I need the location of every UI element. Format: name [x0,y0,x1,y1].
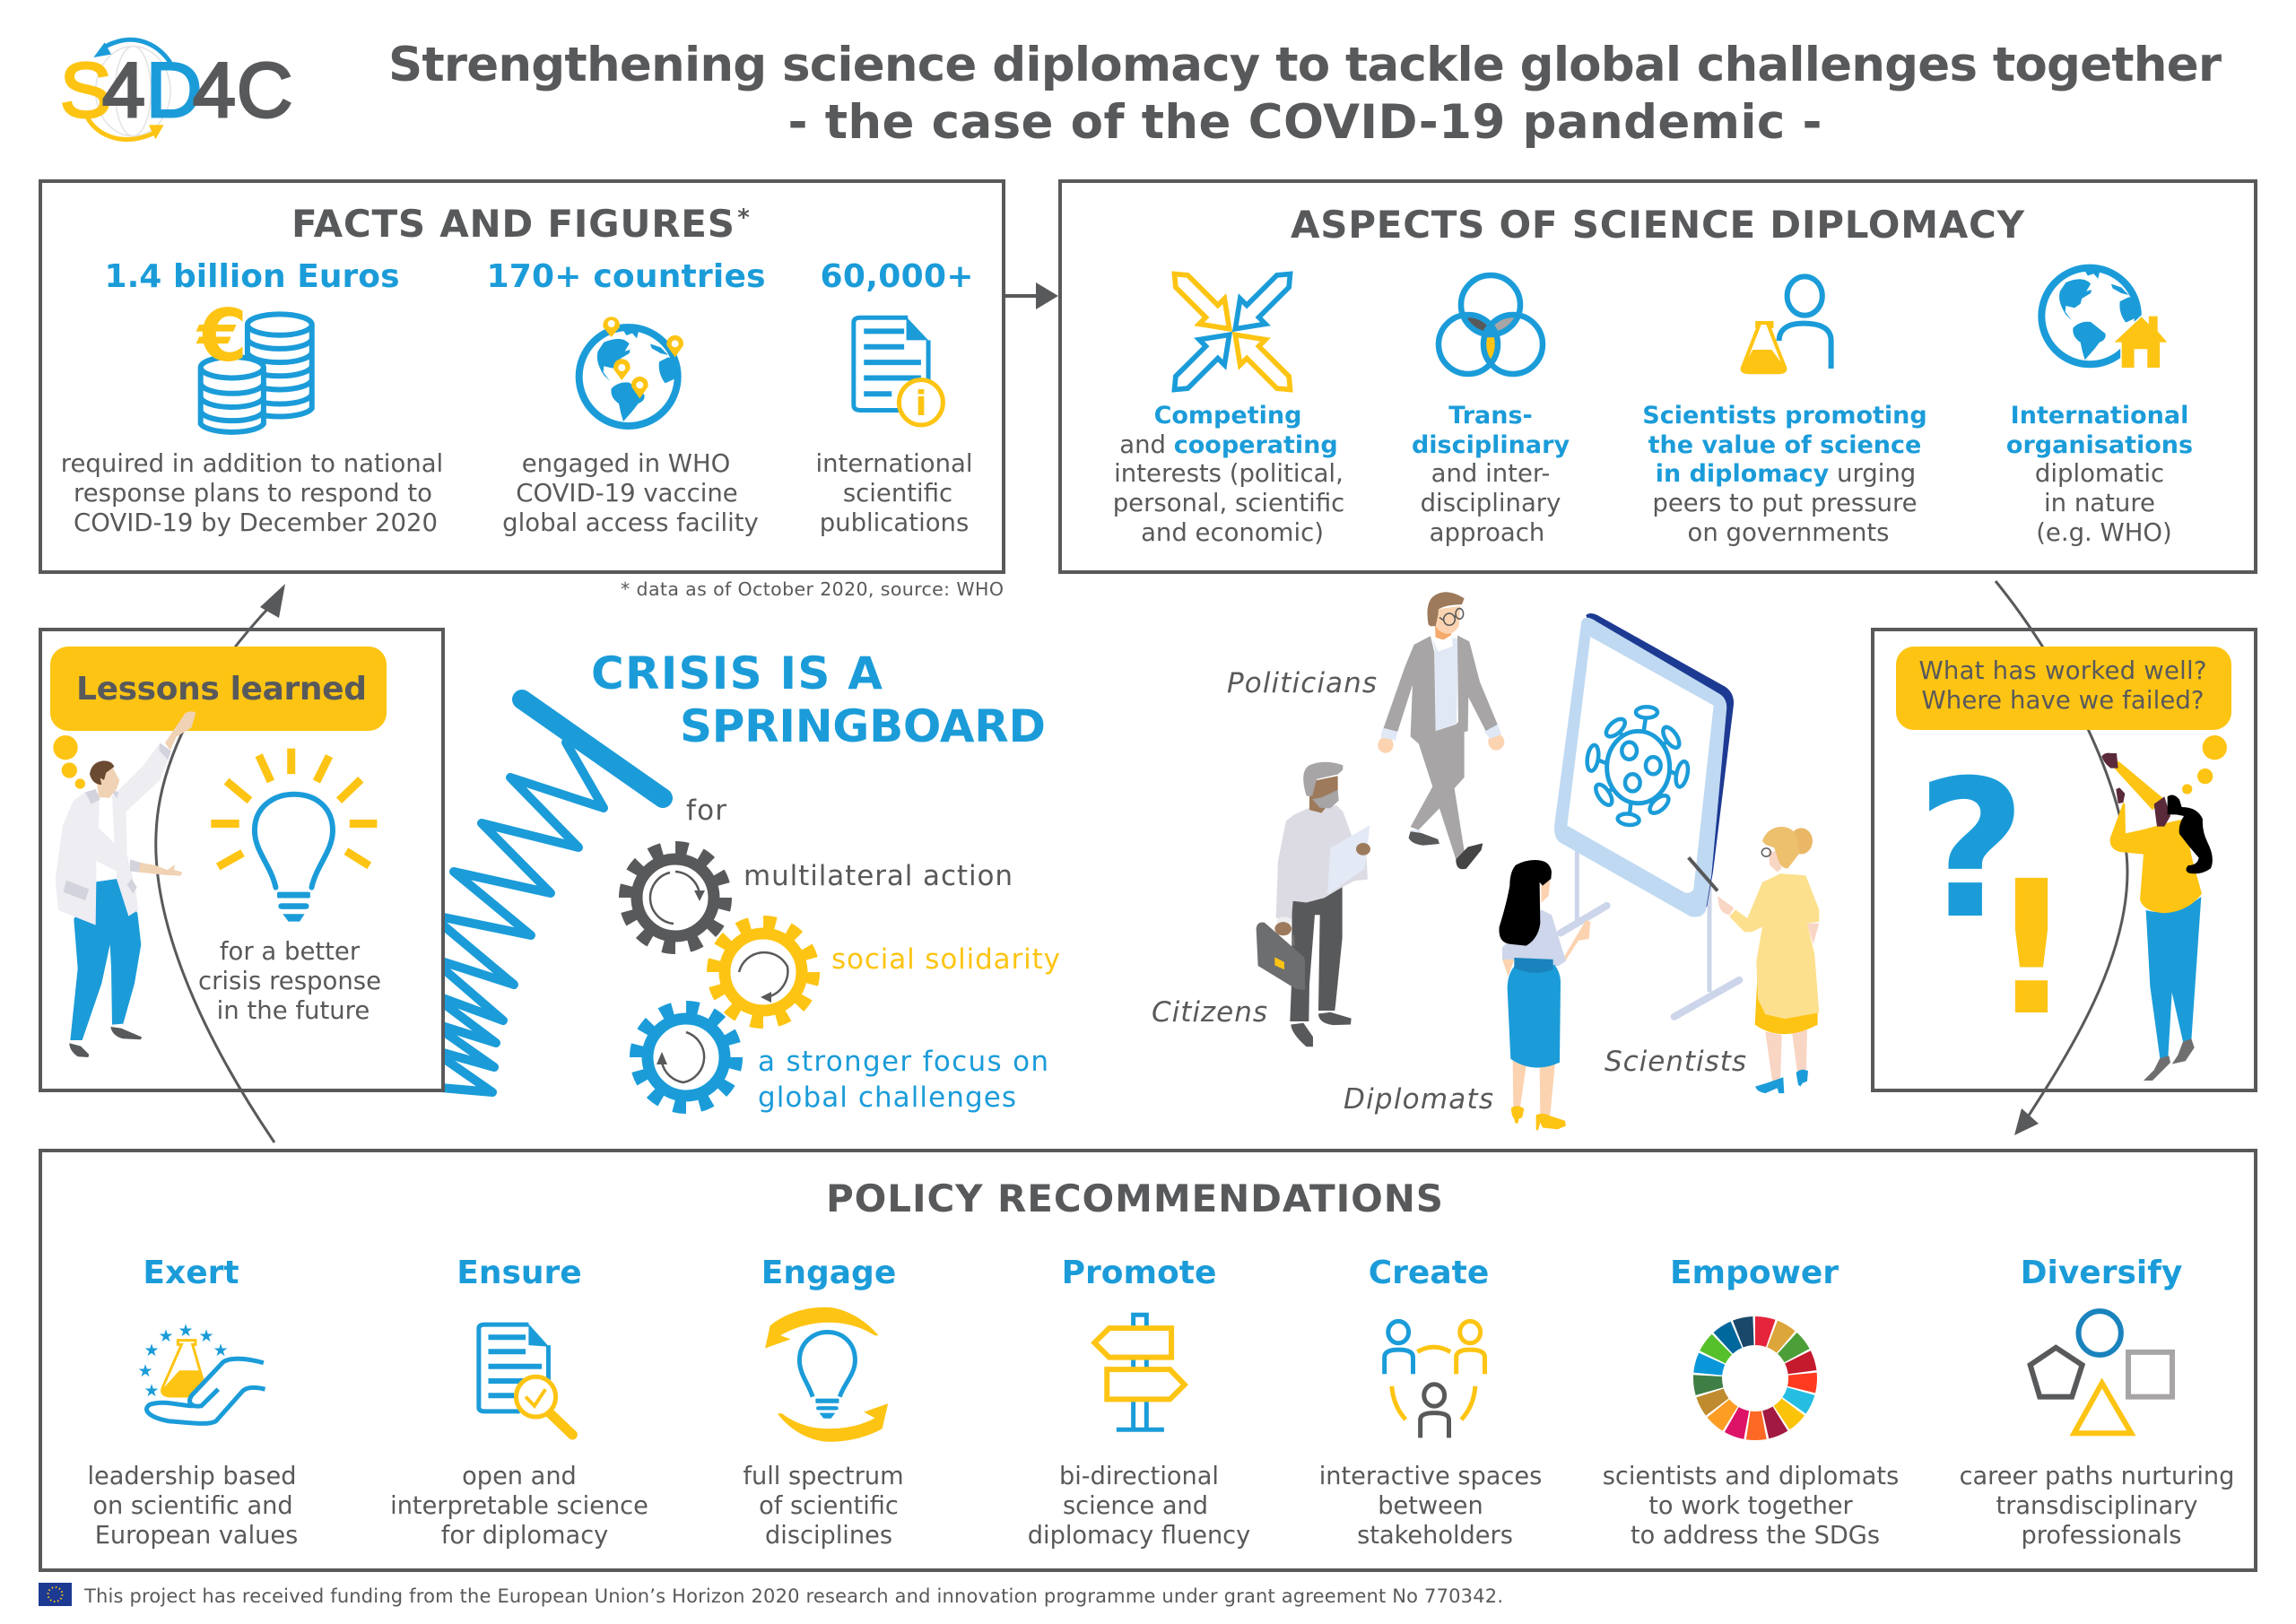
aspect: transdisciplinary [1412,275,1570,547]
icon: hand holding flask with stars: ★ [144,1341,160,1360]
item: promote: bi-directional [1059,1463,1219,1490]
item: diversify: professionals [2022,1522,2181,1550]
item: ensure [390,1255,648,1550]
stat: 60,000+ [815,258,974,537]
item: exert: European values [95,1522,298,1550]
item: engage: disciplines [765,1522,892,1550]
arrow: facts to aspects [1004,282,1058,309]
description [815,449,973,537]
text [1412,402,1570,547]
stat: 170+ countries [486,258,766,537]
item: ensure: interpretable science [390,1492,648,1520]
description: COVID-19 by December 2020 [74,508,438,537]
icon: globe and house [2041,268,2167,368]
footnote asterisk: * [737,204,750,231]
stat: 60,000+: 60,000+ [820,258,974,295]
item: exert: Exert [143,1255,239,1291]
title: - the case of the COVID-19 pandemic - [787,95,1822,150]
gear: social solidarity: social solidarity [831,943,1060,976]
text: organisations [2006,431,2193,459]
icon: hand holding flask with stars: ★ [213,1341,229,1360]
item: create: Create [1369,1255,1489,1291]
heading: crisis is a springboard: CRISIS IS A [591,647,883,699]
item: create [1319,1255,1542,1550]
panel: lessons learned [40,630,443,1090]
item: exert: on scientific and [92,1492,293,1520]
panel: policy recommendations [40,1151,2256,1570]
footer: EU flag [39,1583,72,1606]
heading: facts and figures: FACTS AND FIGURES [291,202,735,246]
icon: light bulb [211,749,377,922]
icon: exclamation mark: ! [1989,841,2074,1056]
label: politicians: Politicians [1227,667,1377,699]
text: Scientists promoting [1642,402,1927,430]
icon: converging arrows [1161,261,1303,403]
aspect: competing and cooperating [1113,261,1344,547]
item: promote: science and [1063,1492,1208,1520]
caption: in the future [217,996,370,1025]
label: diplomats: Diplomats [1344,1083,1493,1116]
description: global access facility [502,508,759,537]
icon: venn circles [1436,275,1545,377]
item: empower: Empower [1670,1255,1839,1291]
item: diversify: transdisciplinary [1996,1492,2197,1520]
item: empower: to address the SDGs [1631,1522,1880,1550]
item: engage: Engage [761,1255,896,1291]
description: COVID-19 vaccine [516,479,738,508]
icon: hand holding flask with stars: ★ [198,1326,214,1346]
panel: questions [1873,630,2256,1090]
icon: spring [430,699,663,1092]
icon: virus [1586,707,1690,826]
text: Competing [1154,402,1301,430]
text: interests (political, [1114,459,1344,488]
gear: multilateral action [625,847,1013,948]
description: response plans to respond to [74,479,432,508]
heading: policy recommendations: POLICY RECOMMENDATIONS [826,1177,1443,1220]
item: create: between [1378,1492,1483,1520]
text: the value of science [1648,431,1921,459]
description [502,449,759,537]
description: required in addition to national [61,449,443,478]
text [1642,402,1927,547]
item: ensure: open and [462,1463,577,1490]
footnote: * data as of October 2020, source: WHO [621,578,1004,600]
gear: a stronger focus on global challenges: global challenges [758,1081,1016,1114]
text: (e.g. WHO) [2036,518,2172,547]
footer: funding statement: This project has received funding from the European Union’s Horizon 2020 research and innovation programme under grant agreement No 770342. [83,1585,1503,1607]
text: diplomatic [2035,459,2164,488]
panel: aspects of science diplomacy [1060,181,2256,572]
item: create: interactive spaces [1319,1463,1542,1490]
caption [198,937,381,1025]
description: international [815,449,973,478]
figure: man pointing [53,711,196,1057]
figure: citizen [1257,762,1370,1046]
title: Strengthening science diplomacy to tackle global challenges together [388,38,2222,92]
icon: document with info badge: i [915,384,927,423]
arrow: recommendations to facts [156,584,285,1142]
figure: woman pointing [2101,735,2227,1081]
text: on governments [1688,518,1889,547]
item: promote: diplomacy fluency [1028,1522,1250,1550]
callout: lessons learned [50,647,387,731]
text: in nature [2044,489,2155,517]
description: publications [820,508,969,537]
text [1113,402,1344,547]
text: and inter- [1431,459,1550,488]
item: diversify [1960,1255,2234,1550]
label: citizens: Citizens [1152,996,1267,1029]
callout: what has worked well [1896,647,2231,730]
panel: facts and figures [40,181,1004,572]
gear: a stronger focus on global challenges [636,1007,1048,1114]
text: and economic) [1141,518,1324,547]
text: for: for [686,795,726,827]
gear: a stronger focus on global challenges: a stronger focus on [758,1046,1048,1078]
icon: document with magnifier [479,1324,572,1435]
icon: shapes [2031,1311,2172,1433]
icon: coins and euro: € [196,294,248,378]
heading: crisis is a springboard: SPRINGBOARD [680,700,1046,752]
heading: aspects: ASPECTS OF SCIENCE DIPLOMACY [1291,203,2025,247]
item: ensure: for diplomacy [441,1522,608,1550]
caption: crisis response [198,967,381,995]
text: approach [1430,518,1544,547]
icon: hand holding flask with stars: ★ [178,1321,194,1341]
item: engage [743,1255,904,1550]
item: exert: leadership based [87,1463,297,1490]
icon: hand holding flask with stars: ★ [158,1326,174,1346]
icon: signpost [1094,1315,1185,1430]
text: disciplinary [1421,489,1561,517]
stat: 170+ countries: 170+ countries [486,258,766,295]
icon: globe with pins [579,317,683,426]
logo: S4D4C: S4D4C [60,48,292,134]
icon: document with info badge [854,317,943,425]
description: engaged in WHO [522,449,730,478]
icon: three people [1385,1321,1484,1437]
item: ensure: Ensure [457,1255,582,1291]
icon: hand holding flask with stars: ★ [137,1361,153,1381]
item: diversify: career paths nurturing [1960,1463,2234,1490]
icon: coins and euro [196,294,312,432]
item: create: stakeholders [1357,1522,1513,1550]
text: disciplinary [1412,431,1570,459]
text [2006,402,2193,547]
callout: lessons learned: Lessons learned [76,671,367,708]
icon: question mark: ? [1917,739,2026,960]
callout: what has worked well: Where have we failed? [1921,686,2205,715]
aspect: international organisations [2006,268,2193,547]
icon: SDG wheel [1688,1311,1822,1446]
icon: hand holding flask with stars [137,1321,265,1423]
item: promote: Promote [1062,1255,1216,1291]
aspect: scientists promoting [1642,276,1927,547]
text: Trans- [1448,402,1533,430]
description: scientific [843,479,952,508]
item: promote [1028,1255,1250,1550]
text: International [2011,402,2188,430]
figure: diplomat [1499,860,1607,1131]
item: diversify: Diversify [2021,1255,2182,1291]
gear: social solidarity [713,922,1060,1022]
item: engage: of scientific [759,1492,899,1520]
figure: scientist [1689,827,1819,1093]
stat: 1.4 billion Euros [61,258,443,537]
caption: for a better [220,937,361,966]
item: empower: to work together [1648,1492,1854,1520]
text: personal, scientific [1113,489,1344,517]
callout: what has worked well: What has worked well? [1919,656,2206,685]
item: exert [87,1255,298,1550]
illustration: board with virus [1554,613,1739,1017]
text: and cooperating [1119,430,1338,459]
title [388,38,2222,150]
heading: crisis is a springboard [591,647,1046,752]
text: in diplomacy urging [1656,459,1916,488]
label: scientists: Scientists [1605,1046,1746,1078]
item: engage: full spectrum [743,1463,904,1490]
figure: politician [1378,592,1504,869]
gear: multilateral action: multilateral action [744,860,1013,892]
icon: bulb with cycle arrows [765,1307,888,1442]
description [61,449,443,537]
stat: 1.4 billion Euros: 1.4 billion Euros [104,258,400,295]
arrow: aspects to recommendations [1996,581,2127,1135]
item: empower [1603,1255,1899,1550]
icon: hand holding flask with stars: ★ [144,1381,160,1401]
icon: scientist with flask [1743,276,1831,372]
text: peers to put pressure [1652,489,1918,517]
item: empower: scientists and diplomats [1603,1463,1899,1490]
